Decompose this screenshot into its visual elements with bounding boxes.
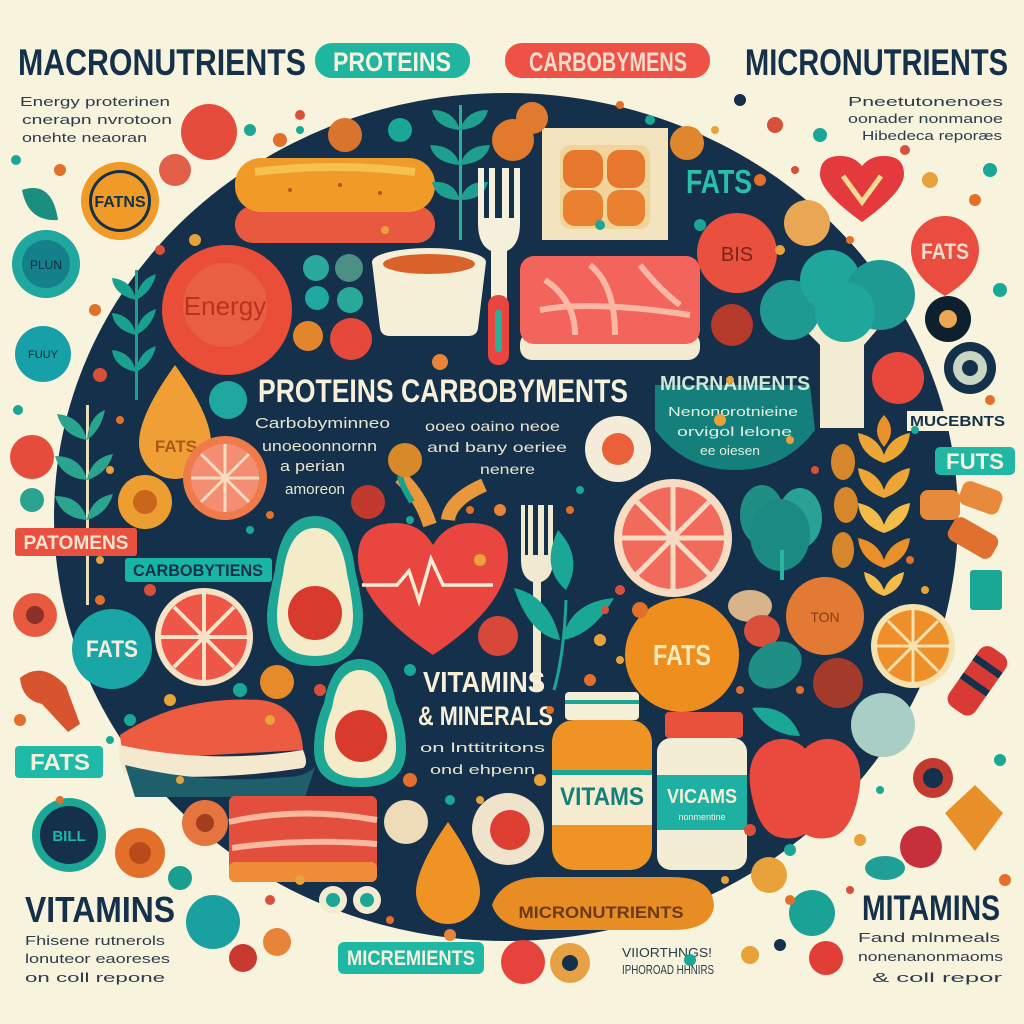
food: hot dog bun	[235, 158, 435, 243]
food: small circle pair	[182, 800, 228, 846]
text block: bottom left: Fhisene rutnerols	[25, 933, 166, 948]
label: micrements bottom: MICREMIENTS	[347, 947, 475, 970]
text block: center right	[425, 418, 567, 477]
panel: micronutrients bubble: MICRNAIMENTS	[660, 373, 810, 395]
food: orange fats circle	[625, 598, 739, 712]
food: package	[542, 128, 668, 240]
food: baguette with label	[492, 877, 714, 930]
food: tomato: Energy	[184, 291, 266, 321]
icon: fats droplet	[139, 365, 211, 479]
text block: bottom left: on coll repone	[25, 970, 165, 985]
text block: bottom left	[25, 933, 171, 985]
text block: top left	[20, 94, 172, 145]
label: fats teal: FATS	[686, 163, 752, 200]
pill: proteins: PROTEINS	[333, 47, 451, 77]
pill: fats bottom left	[15, 746, 103, 778]
food: red circle bottom center	[501, 940, 545, 984]
panel: micronutrients bubble	[655, 373, 815, 470]
icon: leaf sprig top	[430, 105, 490, 240]
food: vitamin bottle orange	[552, 692, 652, 870]
food: tan ring bottom	[550, 943, 590, 983]
food: vitamin bottle white	[657, 712, 747, 870]
heading: vitamins and minerals center: VITAMINS	[423, 667, 545, 699]
label: fats teardrop	[911, 216, 979, 296]
heading: vitamins and minerals center: & MINERALS	[418, 701, 553, 731]
heading: vitamins bottom left: VITAMINS	[25, 889, 175, 930]
icon: fork center	[521, 505, 553, 690]
text block: bottom right: Fand mlnmeals	[858, 930, 1001, 945]
icon: fork top	[478, 168, 520, 365]
food: left teal dot	[20, 488, 44, 512]
text block: center right: ooeo oaino neoe	[425, 418, 560, 434]
heading: proteins carbohydrates center: PROTEINS CARBOBYMENTS	[258, 373, 628, 409]
text block: bottom center: VIIORTHNGS!	[622, 945, 712, 960]
food: left small ball	[168, 866, 192, 890]
pill: fats right	[935, 447, 1015, 475]
label: proteins left	[15, 528, 137, 556]
text block: vitamins center: on lnttitritons	[420, 740, 546, 755]
food: citrus left	[155, 588, 253, 686]
food: dark circle right	[925, 296, 971, 342]
text block: center left: amoreon	[285, 481, 345, 498]
heading: vitamins and minerals center	[418, 667, 553, 731]
food: left red circle	[10, 435, 54, 479]
icon: small teal circle left: FUUY	[28, 349, 59, 361]
food: blue-gray circle	[851, 693, 915, 757]
food: tan circle	[786, 577, 864, 655]
text block: vitamins center	[420, 740, 546, 777]
food: orange shapes right	[920, 479, 1005, 562]
food: baguette with label: MICRONUTRIENTS	[518, 903, 684, 922]
icon: plant lower left	[55, 405, 113, 605]
food: red dark ball right	[900, 826, 942, 868]
food: side grain dots	[831, 444, 858, 568]
food: red circle	[697, 213, 777, 293]
food: mushroom mid	[728, 590, 810, 698]
food: soup cup	[372, 248, 486, 336]
icon: teal leaf top-left	[22, 188, 58, 220]
food: fish fillet	[119, 699, 315, 797]
food: vitamin bottle orange: VITAMS	[560, 783, 644, 811]
icon: teal circle left	[12, 230, 80, 298]
food: orange fats circle: FATS	[653, 640, 711, 672]
food: teal small	[209, 381, 247, 419]
food: teal ring	[944, 342, 996, 394]
food: teal ball bottom	[186, 895, 240, 949]
icon: leaf spray center	[514, 530, 614, 690]
food: grain wheat	[858, 415, 910, 596]
text block: bottom center: IPHOROAD HHNIRS	[622, 962, 714, 977]
food: citrus egg	[472, 793, 544, 865]
text block: top right: oonader nonmanoe	[848, 111, 1003, 126]
text block: bottom left: lonuteor eaoreses	[25, 951, 171, 966]
food: striped item right	[944, 642, 1011, 719]
text block: bottom right: & coll repor	[872, 970, 1003, 985]
icon: circle fating left: FATNS	[94, 194, 146, 211]
food: broccoli	[760, 250, 915, 428]
panel: central dark circle	[54, 93, 958, 941]
icon: orange droplet	[416, 822, 480, 924]
food: avocado top	[267, 516, 363, 666]
panel: micronutrients bubble: ee oiesen	[700, 443, 760, 458]
food: red berry right	[872, 352, 924, 404]
text block: top right: Hibedeca reporæs	[862, 128, 1003, 143]
food: teal berries	[293, 254, 372, 360]
label: fats teardrop: FATS	[921, 239, 969, 264]
text block: top right	[848, 94, 1004, 143]
food: red circle bottom	[229, 944, 257, 972]
pill: fats right: FUTS	[946, 449, 1004, 474]
food: orange slice right	[871, 604, 955, 688]
text block: top left: Energy proterinen	[20, 94, 170, 109]
pill: carbohydrates: CARBOBYMENS	[529, 47, 687, 77]
food: teal ball right bottom	[789, 890, 835, 936]
text block: bottom right: nonenanonmaoms	[858, 949, 1004, 964]
text block: top right: Pneetutonenoes	[848, 94, 1004, 109]
food: orange dot bottom	[263, 928, 291, 956]
text block: center right: and bany oeriee	[427, 439, 567, 455]
food: egg center	[585, 416, 651, 482]
food: sun flower	[118, 475, 172, 529]
icon: tag right	[970, 570, 1002, 610]
icon: heart with pulse	[358, 476, 508, 655]
food: red circle: BIS	[721, 244, 753, 266]
text block: top left: onehte neaoran	[22, 130, 147, 145]
text block: bottom right	[858, 930, 1004, 985]
text block: center left: Carbobyminneo	[255, 415, 390, 432]
food: salmon	[520, 256, 700, 360]
panel: micronutrients bubble: Nenonorotnieine	[668, 404, 798, 419]
label: proteins left: PATOMENS	[24, 533, 128, 554]
icon: circle fating left	[81, 162, 159, 240]
panel: micronutrients bubble: orvigol lelone	[677, 424, 792, 439]
text block: center left: unoeoonnornn	[262, 438, 377, 455]
text block: center left	[255, 415, 390, 498]
food: tan circle: TON	[810, 609, 840, 625]
icon: orange fruit left	[159, 154, 191, 186]
food: cream circle	[384, 800, 428, 844]
food: bacon	[229, 796, 377, 882]
text block: bottom center	[622, 945, 714, 977]
text block: center left: a perian	[280, 458, 345, 475]
food: tomato	[162, 245, 292, 375]
icon: fats droplet: FATS	[155, 437, 197, 456]
food: teal link pair	[319, 886, 381, 914]
text block: top left: cnerapn nvrotoon	[22, 112, 172, 127]
food: dark red ring	[813, 658, 863, 708]
icon: teal ring badge: BILL	[52, 828, 86, 845]
icon: small teal circle left	[15, 326, 71, 382]
food: red ring left	[13, 593, 57, 637]
food: teal pill right	[865, 856, 905, 880]
heading: macronutrients: MACRONUTRIENTS	[18, 42, 306, 83]
icon: leaf big right	[740, 485, 822, 580]
pill: carbohydrates	[505, 43, 710, 78]
icon: teal ring badge	[32, 798, 106, 872]
text block: center right: nenere	[480, 461, 535, 477]
label: fats circle	[72, 609, 152, 689]
food: mushroom left edge	[20, 671, 80, 732]
food: orange flower	[115, 828, 165, 878]
food: citrus large	[614, 479, 732, 597]
label: micrements bottom	[338, 942, 484, 974]
icon: red fruit top left	[181, 104, 237, 160]
icon: heart top right	[820, 156, 904, 222]
food: red ball right bottom	[809, 941, 843, 975]
pill: fats bottom left: FATS	[30, 749, 90, 775]
food: ring right	[913, 758, 953, 798]
food: orange star right	[945, 785, 1003, 851]
label: carbohydrates left: CARBOBYTIENS	[133, 561, 263, 580]
label: fats circle: FATS	[86, 636, 138, 663]
food: avocado bottom	[314, 659, 406, 787]
food: orange circle	[784, 200, 830, 246]
icon: teal circle left: PLUN	[30, 258, 62, 272]
label: micronutrients right: MUCEBNTS	[910, 413, 1005, 430]
food: apple	[750, 708, 860, 838]
food: vitamin bottle white: nonmentine	[678, 812, 726, 822]
icon: fern left	[112, 270, 156, 400]
food: vitamin bottle white: VICAMS	[667, 786, 737, 808]
food: grapefruit small	[183, 436, 267, 520]
text block: vitamins center: ond ehpenn	[430, 762, 535, 777]
